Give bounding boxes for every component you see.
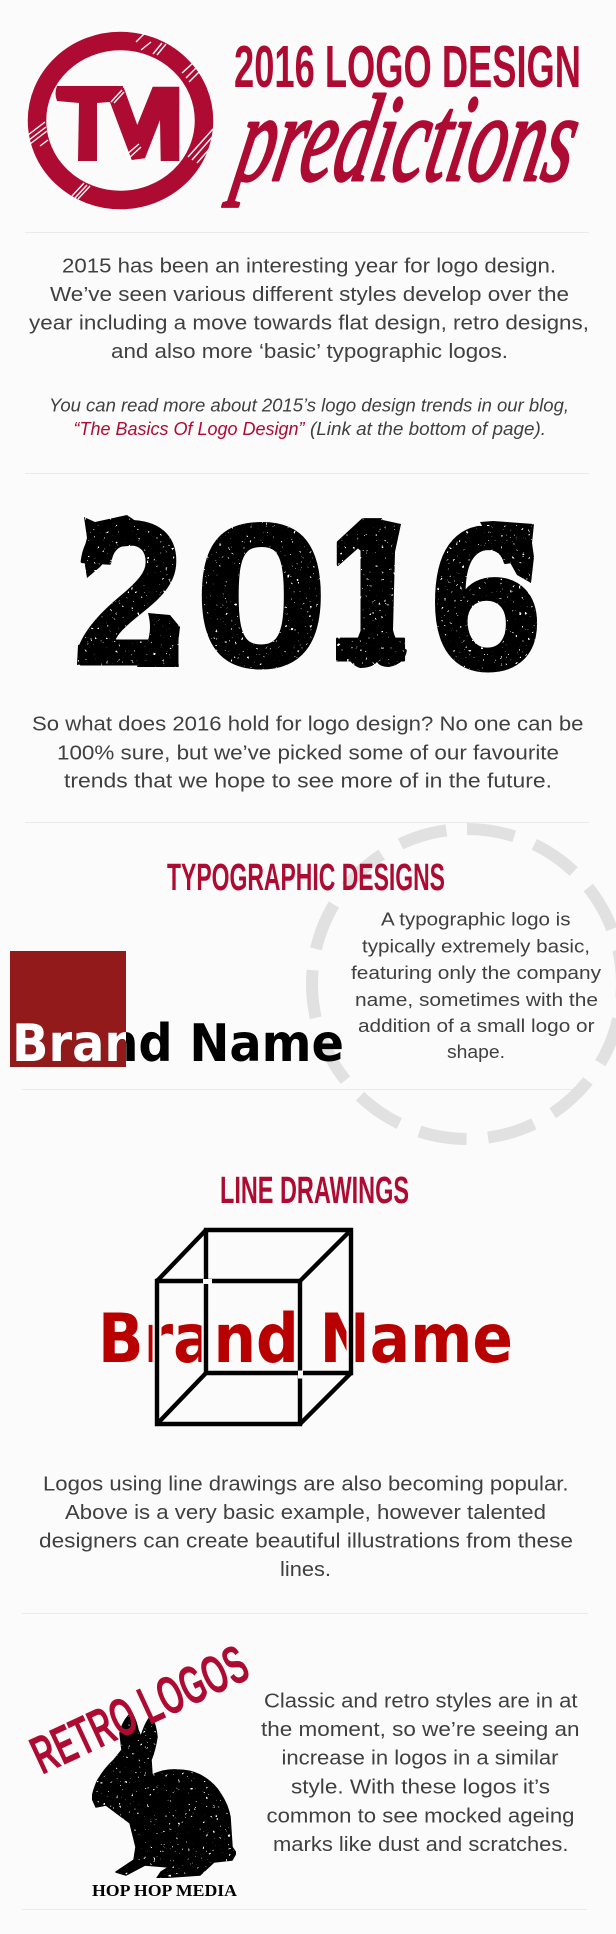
icon: TM logo roundel <box>28 33 213 200</box>
text block: typographic logo: shape. <box>447 1041 505 1062</box>
text block: typographic logo: addition of a small logo or <box>358 1015 594 1036</box>
dashed circle backdrop <box>312 829 616 1139</box>
text block: retro logos: increase in logos in a similar <box>282 1748 559 1770</box>
text block: typographic logo: typically extremely basic, <box>362 936 590 956</box>
text block: typographic logo <box>351 908 602 1062</box>
heading: line drawings: LINE DRAWINGS <box>220 1169 409 1212</box>
text block: line drawings: lines. <box>280 1559 331 1581</box>
text block: blog note <box>49 396 569 439</box>
text block: line drawings: Above is a very basic example, however talented <box>65 1502 546 1524</box>
text block: retro logos: common to see mocked ageing <box>266 1806 574 1828</box>
big distressed 2016: 6 <box>429 485 543 713</box>
text block: intro: 2015 has been an interesting year for logo design. <box>62 256 556 278</box>
text block: intro: We’ve seen various different styles develop over the <box>50 284 569 306</box>
text block: blog note: (Link at the bottom of page). <box>310 419 546 439</box>
typographic logo example <box>10 951 344 1074</box>
text block: retro logos: Classic and retro styles are in at <box>264 1690 578 1712</box>
big distressed 2016: 0 <box>194 482 329 710</box>
text block: intro: and also more ‘basic’ typographic logos. <box>111 341 508 363</box>
text block: intro: year including a move towards flat design, retro designs, <box>29 312 589 334</box>
big distressed 2016 <box>74 476 543 713</box>
heading: retro logos (rotated): RETRO LOGOS <box>22 1634 257 1786</box>
typographic logo example: Brand Name <box>12 1014 344 1074</box>
text block: what does 2016 hold <box>32 714 584 792</box>
icon: distressed rabbit <box>92 1713 236 1878</box>
text block: what does 2016 hold: So what does 2016 hold for logo design? No one can be <box>32 714 584 736</box>
text block: blog note: You can read more about 2015’s logo design trends in our blog, <box>49 396 569 416</box>
line drawing logo example: Brand Name <box>98 1300 513 1379</box>
text block: line drawings: designers can create beautiful illustrations from these <box>39 1530 573 1552</box>
text block: line drawings <box>39 1474 573 1581</box>
text block: retro logos: marks like dust and scratches. <box>273 1834 568 1856</box>
text block: line drawings: Logos using line drawings are also becoming popular. <box>43 1474 568 1496</box>
big distressed 2016: 1 <box>328 476 408 704</box>
text block: retro logos: style. With these logos it’s <box>291 1776 550 1798</box>
typographic logo example: Brand Name <box>12 1014 344 1074</box>
text block: retro logos <box>261 1690 580 1856</box>
text block: what does 2016 hold: 100% sure, but we’ve picked some of our favourite <box>57 742 559 764</box>
text block: intro <box>29 256 589 363</box>
text block: typographic logo: name, sometimes with the <box>355 989 598 1010</box>
text block: blog note: “The Basics Of Logo Design” <box>74 419 305 439</box>
text block: what does 2016 hold: trends that we hope to see more of in the future. <box>64 770 552 792</box>
text block: retro logos: the moment, so we’re seeing an <box>261 1719 580 1741</box>
rabbit logo name: HOP HOP MEDIA <box>92 1881 237 1900</box>
line drawing logo example <box>98 1230 513 1424</box>
text block: typographic logo: featuring only the company <box>351 962 602 983</box>
text block: typographic logo: A typographic logo is <box>381 908 570 930</box>
big distressed 2016: 2 <box>74 480 185 708</box>
